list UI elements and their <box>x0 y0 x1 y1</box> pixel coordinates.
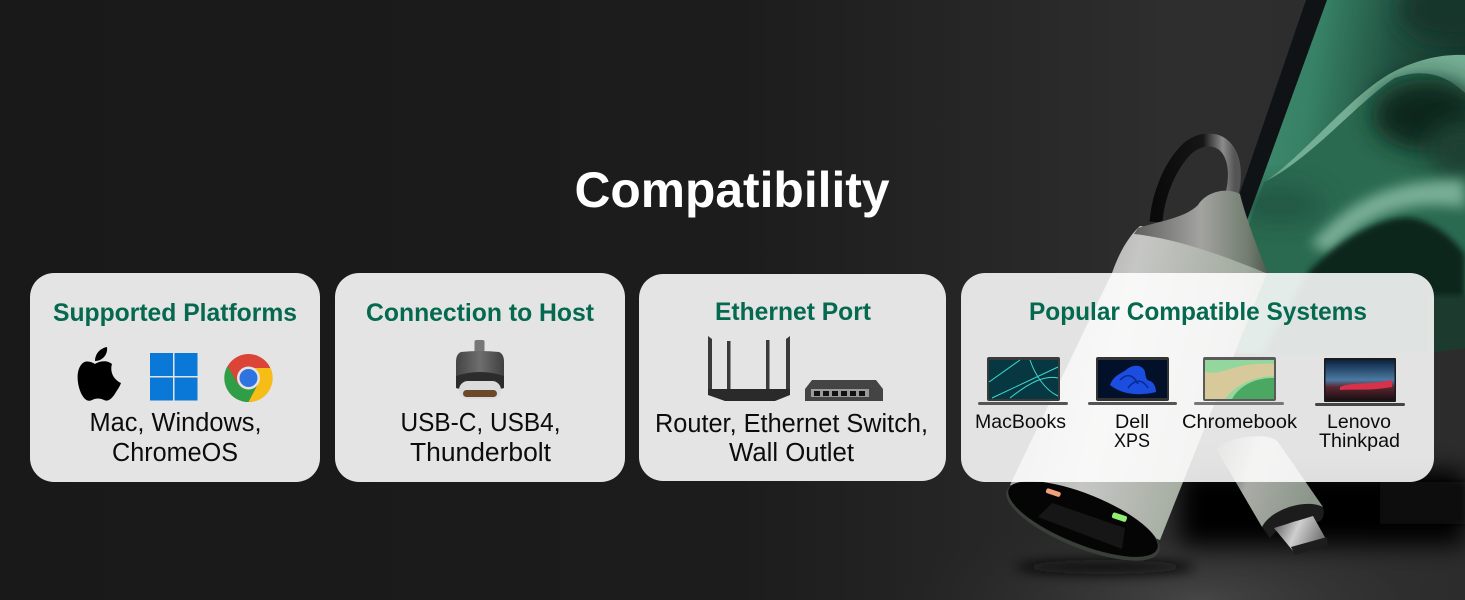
USB-C plug on floor <box>1217 436 1323 529</box>
icon: chrome <box>224 354 273 402</box>
ethernet text: Router, Ethernet Switch, <box>655 410 928 438</box>
laptop: chromebook <box>1194 357 1284 405</box>
label: lenovo thinkpad: Thinkpad <box>1319 430 1400 452</box>
keyboard base <box>1380 482 1465 524</box>
connection text: Thunderbolt <box>410 439 551 467</box>
platforms text: Mac, Windows, <box>90 409 262 437</box>
heading: popular compatible systems: Popular Compatible Systems <box>1029 298 1367 326</box>
connection text: USB-C, USB4, <box>400 409 560 437</box>
orange LED <box>1045 488 1061 497</box>
label: macbooks: MacBooks <box>975 411 1066 433</box>
icon: router <box>708 336 790 401</box>
label: dell xps: XPS <box>1114 430 1150 452</box>
platforms text <box>90 409 262 467</box>
title: Compatibility <box>574 162 890 218</box>
heading: connection to host: Connection to Host <box>366 299 595 327</box>
ethernet text: Wall Outlet <box>729 439 854 467</box>
ethernet text <box>655 410 928 467</box>
background <box>880 0 1465 600</box>
label: lenovo thinkpad <box>1319 411 1400 452</box>
icon: ethernet switch <box>805 380 883 401</box>
connection text <box>400 409 560 467</box>
panel: ethernet port <box>639 274 946 481</box>
port end <box>1006 482 1160 560</box>
label: dell xps: Dell <box>1115 411 1149 433</box>
panel: supported platforms <box>30 273 320 482</box>
loop cable <box>1156 140 1234 222</box>
laptop: macbook <box>978 357 1068 405</box>
platforms text: ChromeOS <box>112 439 238 467</box>
adapter body <box>1010 226 1267 540</box>
icon: windows <box>150 353 198 400</box>
label: chromebook: Chromebook <box>1182 411 1297 433</box>
icon: apple <box>78 347 121 401</box>
panel: connection to host <box>335 273 625 482</box>
laptop screen photo <box>1236 0 1465 354</box>
label: dell xps <box>1114 411 1150 452</box>
heading: supported platforms: Supported Platforms <box>53 299 297 327</box>
adapter cap <box>1134 191 1268 274</box>
label: lenovo thinkpad: Lenovo <box>1327 411 1391 433</box>
laptop: dell xps <box>1088 357 1177 405</box>
floor shadow <box>1015 560 1195 574</box>
green LED <box>1111 512 1128 522</box>
adapter body and cable photo <box>997 140 1465 577</box>
panel: popular compatible systems <box>961 273 1434 482</box>
icon: usb-c plug <box>456 340 504 399</box>
laptop: lenovo thinkpad <box>1315 358 1405 406</box>
heading: ethernet port: Ethernet Port <box>715 298 872 326</box>
